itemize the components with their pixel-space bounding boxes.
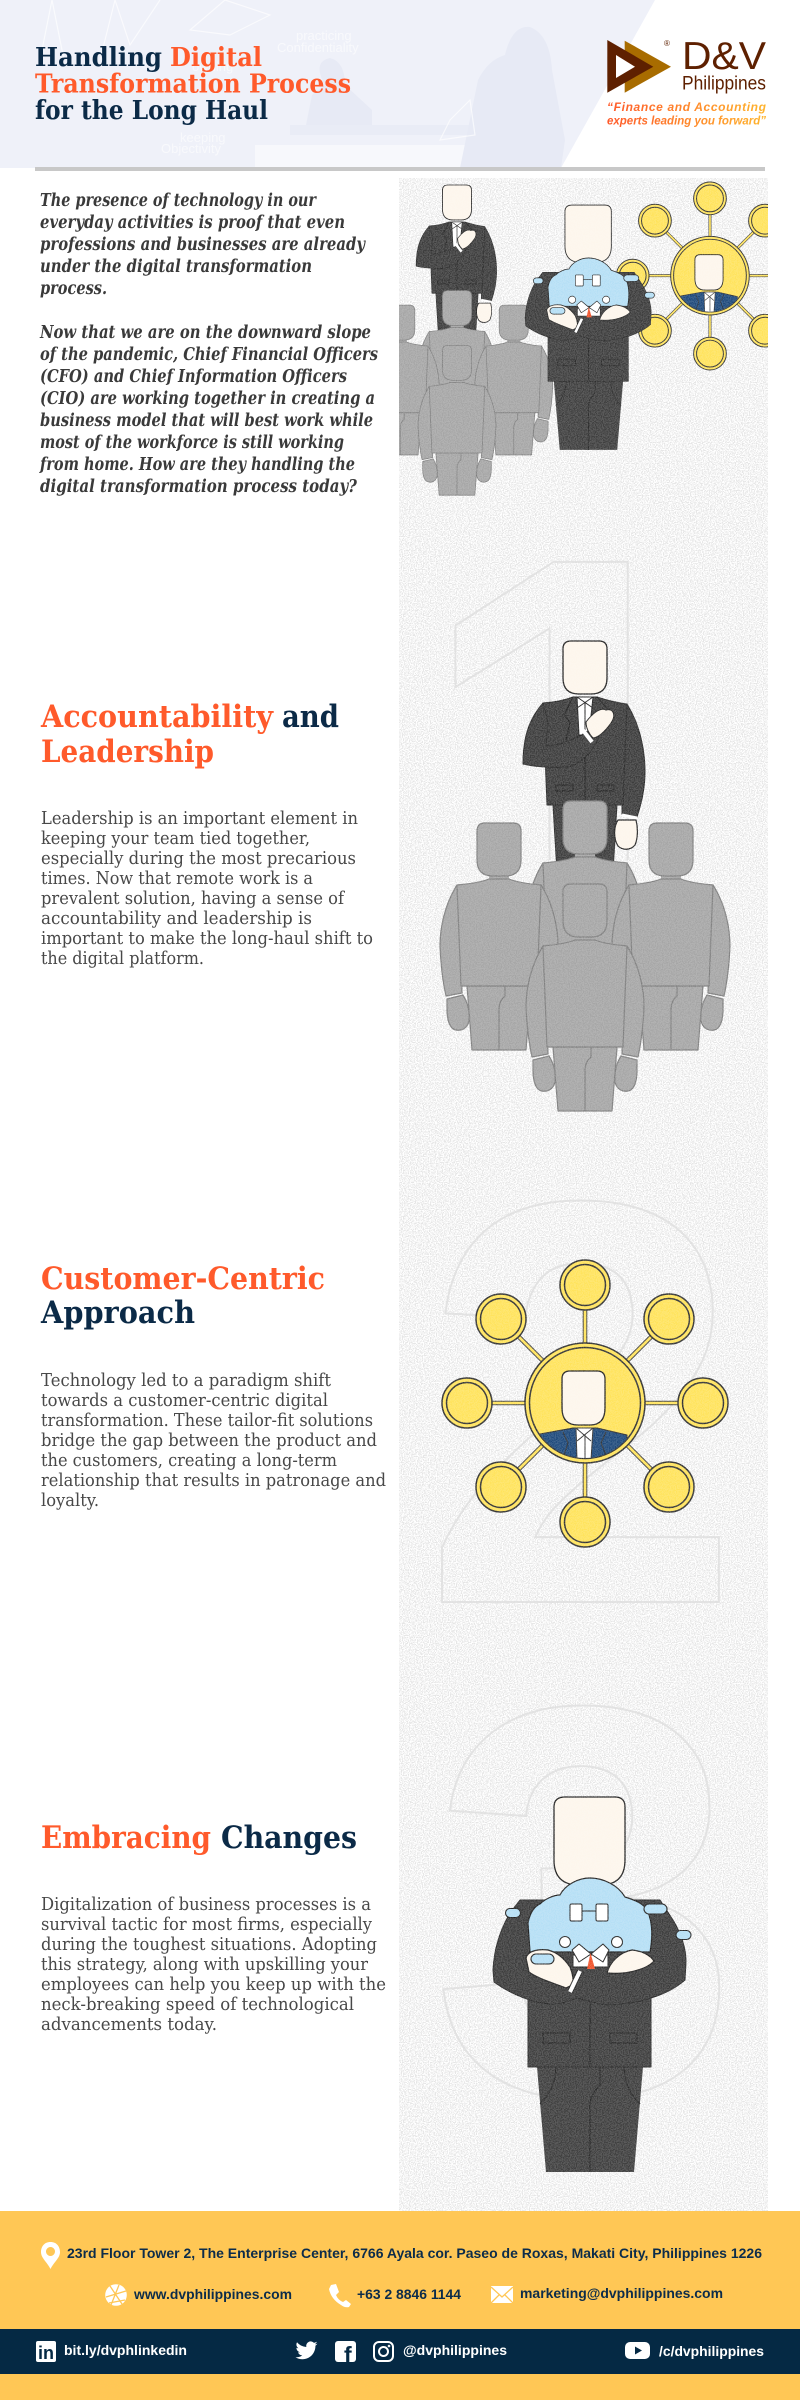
header background photo: keeping	[180, 130, 226, 145]
title: Handling	[35, 43, 162, 73]
logo: D&V Philippines: experts leading you forward”	[607, 113, 766, 127]
logo: D&V Philippines: ®	[664, 39, 670, 48]
icon: youtube	[625, 2342, 650, 2359]
logo: D&V Philippines	[607, 35, 767, 127]
speckle overlay on illustrations	[399, 178, 768, 2211]
section 2 body text: loyalty.	[41, 1490, 99, 1511]
section 3 body text: survival tactic for most firms, especially	[41, 1914, 373, 1935]
intro text: everyday activities is proof that even	[40, 213, 345, 233]
section 1 heading: and	[282, 699, 339, 735]
footer: address row: 23rd Floor Tower 2, The Enterprise Center, 6766 Ayala cor. Paseo de Roxas, Makati City, Philippines 1226	[67, 2245, 762, 2261]
footer: contact row: marketing@dvphilippines.com	[520, 2285, 723, 2301]
header background photo: Confidentiality	[277, 40, 359, 55]
logo: D&V Philippines: “Finance and Accounting	[607, 100, 767, 114]
icon: twitter	[296, 2341, 318, 2359]
header background photo	[0, 0, 655, 168]
section 2 body text: Technology led to a paradigm shift	[41, 1370, 332, 1391]
section 2 body text: the customers, creating a long-term	[41, 1450, 337, 1471]
footer: navy social bar: bit.ly/dvphlinkedin	[64, 2342, 187, 2358]
section 2 heading	[40, 1261, 325, 1331]
footer: navy social bar: @dvphilippines	[403, 2342, 507, 2358]
intro text: (CFO) and Chief Information Officers	[40, 367, 347, 387]
section 3 body text	[41, 1894, 386, 2035]
section 2 body text: relationship that results in patronage and	[41, 1470, 386, 1491]
section 1 heading: Accountability	[40, 699, 274, 735]
section 1 body text: important to make the long-haul shift to	[41, 928, 373, 949]
intro text: process.	[40, 279, 107, 299]
footer band	[0, 2211, 800, 2400]
logo: D&V Philippines: D&V	[682, 35, 766, 78]
intro text: digital transformation process today?	[40, 477, 358, 497]
section 2 illustration: customer network	[442, 1260, 728, 1547]
section 2 body text: towards a customer-centric digital	[41, 1390, 328, 1411]
footer: contact row: +63 2 8846 1144	[357, 2286, 461, 2302]
section 1 body text: prevalent solution, having a sense of	[41, 888, 345, 909]
intro text: (CIO) are working together in creating a	[40, 389, 375, 409]
ghost numeral 1: 1	[416, 438, 734, 1075]
section 1 heading	[40, 699, 339, 770]
section 1 heading: Leadership	[41, 734, 214, 770]
section 2 heading: Customer-Centric	[41, 1261, 325, 1297]
intro illustration: leaders, team and network	[399, 182, 768, 496]
intro text: The presence of technology in our	[40, 191, 317, 211]
ghost numeral 2: 2	[422, 1081, 742, 1724]
divider rule	[35, 167, 765, 171]
section 1 illustration: leader and team	[440, 641, 730, 1111]
icon: globe	[105, 2284, 127, 2306]
intro text: professions and businesses are already	[40, 235, 367, 255]
icon: phone	[329, 2284, 351, 2307]
header background photo: owning	[192, 59, 233, 74]
title: Transformation Process	[35, 70, 351, 100]
footer: contact row: www.dvphilippines.com	[133, 2286, 292, 2302]
section 1 body text	[41, 808, 373, 969]
section 1 body text: keeping your team tied together,	[41, 828, 310, 849]
ghost numeral 3: 3	[431, 1591, 739, 2211]
intro text: most of the workforce is still working	[40, 433, 344, 453]
intro text: of the pandemic, Chief Financial Officers	[40, 345, 378, 365]
intro text: from home. How are they handling the	[38, 455, 355, 475]
section 3 heading: Changes	[221, 1820, 357, 1856]
footer: navy social bar: /c/dvphilippines	[659, 2343, 764, 2359]
section 2 heading: Approach	[40, 1295, 195, 1331]
intro text: business model that will best work while	[40, 411, 373, 431]
section 3 heading	[41, 1820, 357, 1856]
footer: address row	[41, 2242, 762, 2269]
speckled illustration panel	[399, 178, 768, 2211]
intro text: under the digital transformation	[40, 257, 312, 277]
title	[35, 43, 351, 126]
icon: facebook: f	[344, 2342, 352, 2368]
icon: facebook	[335, 2341, 356, 2368]
section 3 heading: Embracing	[41, 1820, 211, 1856]
intro text: Now that we are on the downward slope	[39, 323, 371, 343]
section 3 body text: employees can help you keep up with the	[41, 1974, 386, 1995]
footer: navy social bar	[0, 2329, 800, 2374]
title: for the Long Haul	[35, 96, 268, 126]
section 3 body text: Digitalization of business processes is a	[41, 1894, 371, 1915]
icon: envelope	[491, 2286, 513, 2303]
section 1 body text: the digital platform.	[41, 948, 204, 969]
icon: linkedin: in	[38, 2343, 54, 2363]
section 2 body text: transformation. These tailor-fit solutions	[41, 1410, 373, 1431]
section 2 body text	[41, 1370, 386, 1511]
section 3 body text: during the toughest situations. Adopting	[41, 1934, 377, 1955]
section 1 body text: accountability and leadership is	[41, 908, 312, 929]
icon: instagram	[374, 2342, 393, 2361]
section 2 body text: bridge the gap between the product and	[41, 1430, 377, 1451]
section 3 illustration: executive with cloud	[493, 1797, 691, 2172]
header background photo: practicing	[296, 28, 352, 43]
logo: D&V Philippines: Philippines	[682, 73, 766, 94]
section 1 body text: especially during the most precarious	[41, 848, 356, 869]
section 1 body text: times. Now that remote work is a	[41, 868, 313, 889]
intro text	[38, 191, 378, 497]
header background photo: Objectivity	[161, 141, 221, 156]
footer: contact row	[105, 2284, 723, 2307]
section 3 body text: neck-breaking speed of technological	[41, 1994, 354, 2015]
title: Digital	[170, 43, 262, 73]
section 3 body text: this strategy, along with upskilling your	[41, 1954, 368, 1975]
section 3 body text: advancements today.	[41, 2014, 217, 2035]
section 1 body text: Leadership is an important element in	[41, 808, 358, 829]
